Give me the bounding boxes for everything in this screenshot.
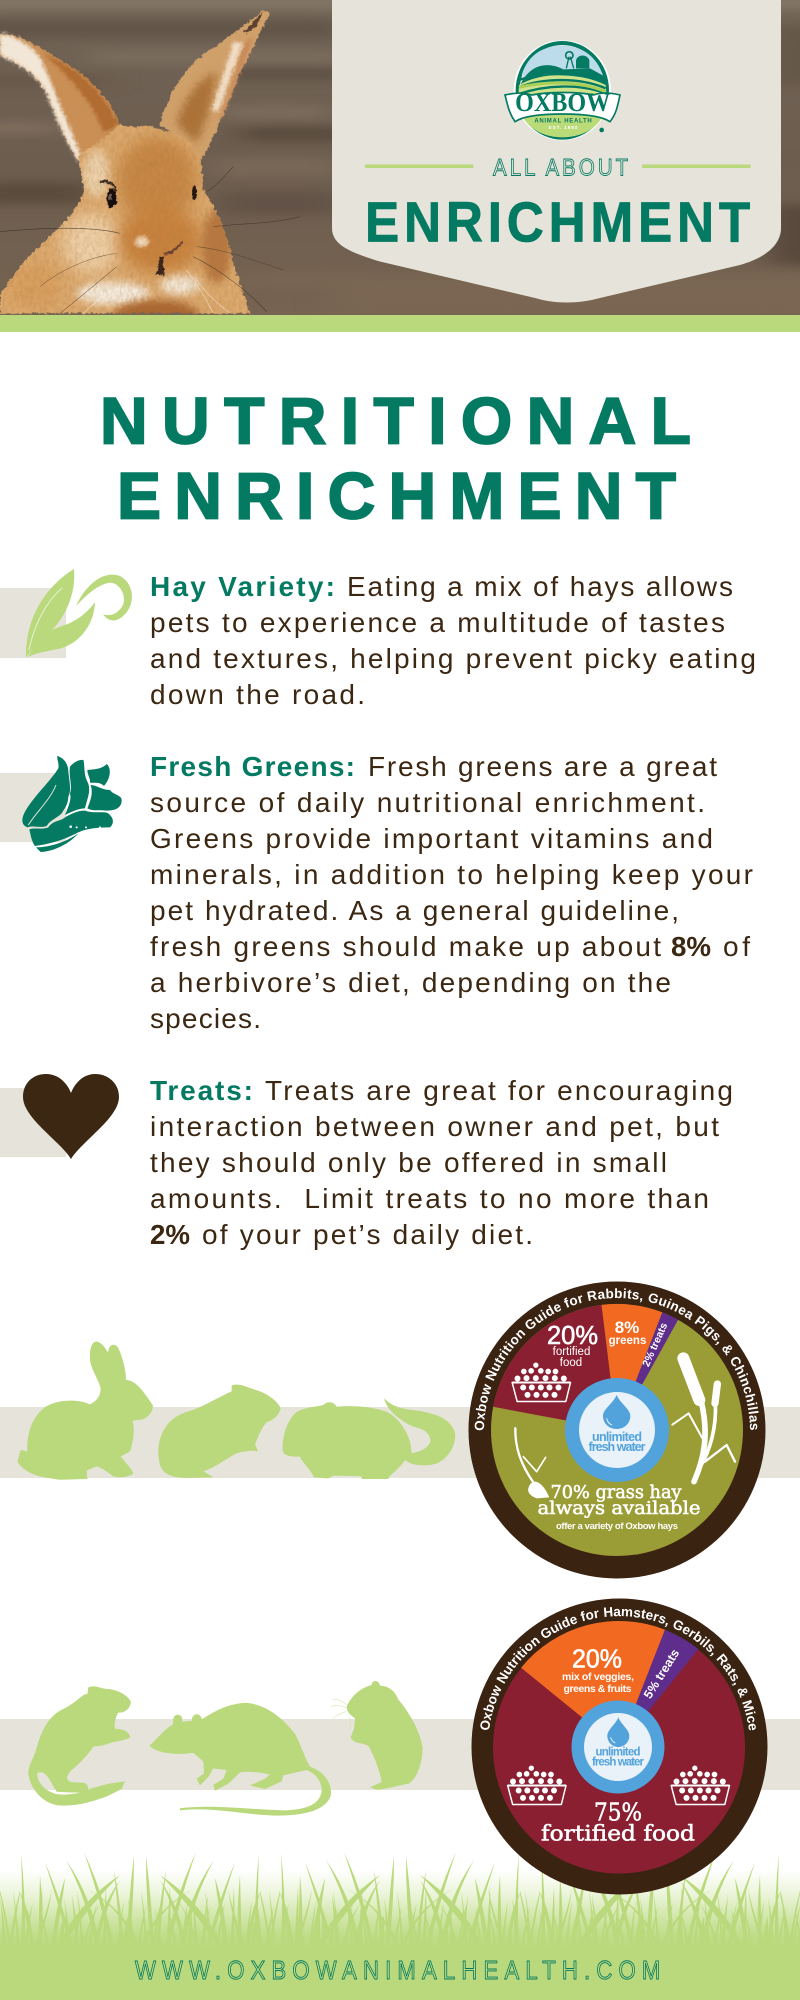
text: fresh greens: pet hydrated. As a general guideline,	[150, 895, 679, 926]
text: treats: 2%	[150, 1219, 190, 1250]
icon: water drop	[603, 1395, 630, 1429]
text: fresh greens: of	[723, 931, 750, 962]
water centre: fresh water	[588, 1440, 646, 1454]
labels: 8% greens: greens	[609, 1335, 646, 1347]
labels: 20% fortified food: food	[560, 1357, 582, 1369]
icon: food bowl right	[671, 1766, 729, 1804]
text: hay variety: down the road.	[150, 679, 365, 710]
nutrition guide wheel: rabbits, guinea pigs, chinchillas	[468, 1282, 766, 1578]
text: hay variety: pets to experience a multitude of tastes	[150, 607, 725, 638]
logo: Oxbow Animal Health: OXBOW	[515, 88, 610, 117]
header panel	[332, 0, 781, 302]
labels: 8% greens: 8%	[615, 1318, 639, 1337]
slice: 8% greens	[602, 1304, 662, 1430]
labels: 70% grass hay: always available	[538, 1499, 700, 1519]
labels: 20% fortified food: 20%	[547, 1320, 598, 1350]
main heading: ENRICHMENT	[117, 458, 676, 532]
text: hay variety	[150, 571, 756, 710]
icon: lettuce	[22, 756, 122, 852]
text: fresh greens: source of daily nutritional enrichment.	[150, 787, 705, 818]
main heading	[100, 384, 691, 532]
slice: 2% treats	[617, 1312, 678, 1430]
hay plant art	[515, 1358, 735, 1498]
labels: 20% mix: mix of veggies,	[562, 1671, 634, 1683]
text: hay variety: and textures, helping prevent picky eating	[150, 643, 756, 674]
water centre: unlimited	[596, 1746, 640, 1758]
grass strip	[0, 1850, 800, 2000]
right ear	[159, 10, 270, 160]
icon: food bowl left	[508, 1766, 566, 1804]
labels: 20% fortified food: fortified	[553, 1346, 590, 1358]
icon: heart	[23, 1074, 119, 1159]
text: treats: they should only be offered in small	[150, 1147, 667, 1178]
labels: 20% fortified food	[547, 1320, 598, 1369]
head and body	[0, 123, 250, 313]
beige band one	[0, 1407, 800, 1478]
all about label with rules: ALL ABOUT	[493, 154, 629, 181]
label: 5% treats: 5% treats	[641, 1647, 682, 1701]
text: fresh greens: Greens provide important vitamins and	[150, 823, 713, 854]
silhouettes: rabbit, guinea pig, chinchilla	[17, 1342, 455, 1480]
slice: 5% treats	[619, 1630, 698, 1748]
labels: 8% greens	[609, 1318, 646, 1347]
icon: water drop	[607, 1717, 629, 1747]
text: treats: Treats are great for encouraging	[265, 1075, 733, 1106]
text: treats: interaction between owner and pet, but	[150, 1111, 719, 1142]
slice: 20% veggies	[521, 1621, 665, 1748]
label: 2% treats: 2% treats	[640, 1321, 670, 1369]
panel title: ENRICHMENT	[365, 191, 750, 254]
text: treats: Treats:	[150, 1075, 253, 1106]
labels: 70% grass hay: 70% grass hay	[550, 1483, 682, 1503]
main heading: NUTRITIONAL	[100, 384, 691, 458]
icon: hay leaves	[26, 569, 132, 658]
website url: WWW.OXBOWANIMALHEALTH.COM	[135, 1956, 660, 1985]
text: treats: of your pet’s daily diet.	[202, 1219, 533, 1250]
logo: Oxbow Animal Health: ANIMAL HEALTH	[534, 119, 592, 125]
text: treats: amounts. Limit treats to no more than	[150, 1183, 709, 1214]
text: fresh greens: Fresh Greens:	[150, 751, 355, 782]
header photo: rabbit on wood	[0, 0, 800, 333]
logo: Oxbow Animal Health: EST. 1980	[549, 125, 578, 130]
item: fresh greens	[0, 751, 753, 1034]
rabbit	[0, 0, 270, 333]
water centre: unlimited	[592, 1430, 642, 1444]
water centre	[572, 1700, 664, 1794]
item: treats	[0, 1074, 733, 1250]
ring title: Oxbow Nutrition Guide for Rabbits, Guinea Pigs, & Chinchillas	[474, 1288, 759, 1430]
logo: Oxbow Animal Health	[505, 40, 620, 140]
labels: 20% mix: greens & fruits	[564, 1683, 632, 1695]
whiskers	[0, 167, 300, 313]
text: fresh greens: 8%	[671, 931, 711, 962]
labels: 70% grass hay	[538, 1483, 700, 1532]
text: fresh greens: a herbivore’s diet, depending on the	[150, 967, 671, 998]
water centre: fresh water	[592, 1756, 645, 1768]
icon: food bowl	[512, 1362, 570, 1401]
labels: 20% mix	[562, 1644, 634, 1695]
labels: 20% mix: 20%	[572, 1644, 622, 1674]
left ear	[0, 33, 119, 163]
text: fresh greens	[150, 751, 753, 1034]
nutrition guide wheel: hamsters, gerbils, rats, mice	[472, 1598, 768, 1894]
labels: 75% fortified food: 75%	[594, 1798, 642, 1826]
labels: 75% fortified food	[541, 1798, 695, 1846]
silhouettes: gerbil, rat, mouse	[28, 1681, 423, 1816]
ring title: Oxbow Nutrition Guide for Hamsters, Gerbils, Rats, & Mice	[480, 1607, 756, 1730]
text: hay variety: Hay Variety:	[150, 571, 335, 602]
text: fresh greens: Fresh greens are a great	[368, 751, 717, 782]
labels: 75% fortified food: fortified food	[541, 1822, 695, 1846]
text: fresh greens: minerals, in addition to helping keep your	[150, 859, 753, 890]
green band under header	[0, 315, 800, 332]
all about label with rules	[365, 154, 750, 181]
text: fresh greens: fresh greens should make up about	[150, 931, 661, 962]
text: hay variety: Eating a mix of hays allows	[347, 571, 733, 602]
labels: 70% grass hay: offer a variety of Oxbow hays	[556, 1521, 678, 1532]
text: treats	[150, 1075, 733, 1250]
item: hay variety	[0, 569, 756, 710]
slice: 20% fortified food	[493, 1305, 617, 1430]
water centre	[565, 1378, 669, 1482]
beige band two	[0, 1719, 800, 1790]
text: fresh greens: species.	[150, 1003, 261, 1034]
